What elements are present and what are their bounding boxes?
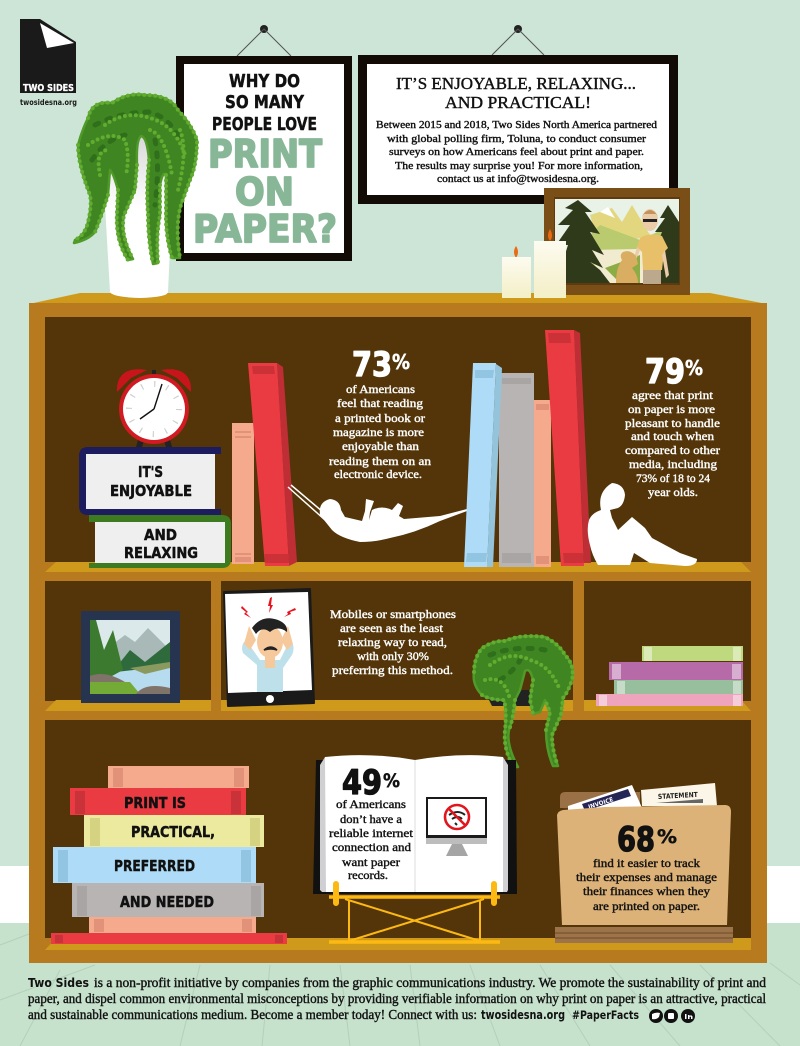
- stat: 73%: magazine is more: [333, 425, 424, 439]
- logo: Two Sides: twosidesna.org: [20, 98, 77, 107]
- icon: girl reading silhouette: [588, 483, 697, 566]
- stat: 68%: are printed on paper.: [593, 899, 700, 913]
- stat: 49%: connection and: [332, 840, 411, 854]
- footer text: #PaperFacts: [572, 1008, 639, 1022]
- title: WHY DO: [229, 71, 300, 92]
- icon: monitor with no wifi: [426, 797, 487, 856]
- footer text: [28, 975, 766, 1022]
- statement: [641, 783, 717, 806]
- plant on top of shelf: [74, 94, 197, 298]
- clock: [117, 369, 191, 447]
- stat: 68%: their finances when they: [583, 884, 710, 898]
- book stand: [329, 884, 500, 942]
- book: it's enjoyable: ENJOYABLE: [110, 482, 192, 500]
- stat: 79%: 79: [645, 352, 685, 391]
- stat: 79%: year olds.: [648, 485, 698, 499]
- stat: 79%: on paper is more: [628, 402, 715, 416]
- intro heading: AND PRACTICAL!: [445, 93, 591, 112]
- panel: intro frame: [358, 25, 678, 204]
- open book on stand: [313, 755, 517, 942]
- book stack: print is practical, preferred and needed: PREFERRED: [114, 857, 195, 875]
- stat: 73%: reading them on an: [329, 454, 431, 468]
- dog: [616, 251, 638, 283]
- text: mobiles: preferring this method.: [332, 663, 453, 677]
- title: PRINT: [208, 132, 323, 177]
- invoice: [568, 785, 643, 815]
- book stack: print is practical, preferred and needed: PRINT IS: [124, 794, 186, 812]
- title: [193, 71, 337, 252]
- framed landscape: [81, 611, 180, 703]
- stat: 49%: records.: [348, 868, 388, 882]
- stat: 73%: enjoyable than: [342, 439, 419, 453]
- stat: 68%: find it easier to track: [593, 856, 700, 870]
- folder with documents: [555, 783, 733, 943]
- stat: 73%: feel that reading: [337, 396, 423, 410]
- icon: person reading in hammock: [288, 485, 467, 542]
- stat: 79%: media, including: [629, 457, 717, 471]
- text: mobiles: are seen as the least: [340, 621, 444, 635]
- books on top shelf, left: [232, 363, 297, 566]
- stat: 49%: don’t have a: [340, 812, 403, 826]
- stat: 49%: of Americans: [336, 797, 406, 811]
- icons: social: [649, 1009, 695, 1023]
- books on top shelf, right: [464, 330, 591, 567]
- intro text: The results may surprise you! For more information,: [395, 160, 643, 172]
- book stack: print is practical, preferred and needed: [51, 766, 287, 944]
- icon: lightning bolts: [241, 597, 296, 618]
- tablet with stressed man: [224, 589, 314, 706]
- stat: 68%: their expenses and manage: [576, 870, 717, 884]
- stat: 79%: %: [685, 356, 703, 380]
- text: mobiles: [330, 607, 456, 677]
- logo: Two Sides: [20, 19, 77, 107]
- stat: 79%: and touch when: [631, 429, 714, 443]
- stat: 49%: 49: [342, 763, 382, 802]
- text: mobiles: relaxing way to read,: [338, 635, 447, 649]
- stat: 68%: 68: [617, 820, 655, 859]
- stat: 79%: compared to other: [625, 443, 720, 457]
- plant pot: [105, 135, 172, 298]
- intro text: with global polling firm, Toluna, to conduct consumer: [387, 133, 646, 145]
- stat: 68%: [576, 820, 717, 913]
- logo: Two Sides: TWO SIDES: [23, 83, 74, 94]
- footer text: Two Sides: [28, 975, 89, 990]
- framed photo: man and dog: [544, 188, 690, 295]
- panel: title frame: [176, 25, 352, 261]
- statement: STATEMENT: [658, 791, 698, 801]
- stat: 68%: %: [657, 826, 677, 848]
- intro heading: IT’S ENJOYABLE, RELAXING...: [396, 74, 636, 93]
- intro text: surveys on how Americans feel about print and paper.: [389, 146, 644, 158]
- footer text: paper, and dispel common environmental misconceptions by providing verifiable information on why print on paper is an attractive, practical: [28, 991, 766, 1006]
- man: [242, 618, 294, 692]
- stat: 49%: reliable internet: [329, 826, 414, 840]
- book: it's enjoyable: [79, 447, 221, 515]
- invoice: INVOICE: [587, 796, 614, 811]
- stat: 79%: pleasant to handle: [625, 416, 720, 430]
- plant on middle shelf: [474, 636, 573, 767]
- intro text: [376, 119, 658, 185]
- candles: [502, 229, 566, 298]
- footer text: and sustainable communications medium. Become a member today! Connect with us:: [28, 1007, 477, 1022]
- stat: 73%: of Americans: [346, 382, 415, 396]
- stat: 79%: agree that print: [632, 388, 714, 402]
- book: it's enjoyable: IT'S: [138, 463, 163, 481]
- title: PEOPLE LOVE: [212, 114, 317, 135]
- text: mobiles: Mobiles or smartphones: [330, 607, 456, 621]
- stat: 49%: %: [383, 770, 400, 792]
- stat: 79%: 73% of 18 to 24: [636, 471, 710, 485]
- stat: 73%: a printed book or: [335, 411, 425, 425]
- stat: 73%: 73: [352, 345, 392, 384]
- title: SO MANY: [225, 92, 305, 113]
- stat: 73%: electronic device.: [334, 467, 422, 481]
- footer text: twosidesna.org: [481, 1008, 565, 1022]
- intro heading: [396, 74, 636, 112]
- book stack: print is practical, preferred and needed: PRACTICAL,: [131, 823, 215, 841]
- text: mobiles: with only 30%: [357, 649, 429, 663]
- stat: 49%: want paper: [342, 855, 400, 869]
- stat: 73%: %: [392, 350, 410, 374]
- title: PAPER?: [193, 207, 337, 252]
- book stack, middle right: [596, 646, 743, 706]
- book: and relaxing: AND: [144, 526, 177, 544]
- shelf unit: [29, 293, 767, 963]
- book: and relaxing: RELAXING: [124, 544, 198, 562]
- stat: 79%: [625, 352, 720, 499]
- stat: 73%: [329, 345, 431, 481]
- man: [634, 209, 669, 284]
- stat: 49%: [329, 763, 414, 882]
- book: and relaxing: [89, 515, 231, 568]
- intro text: contact us at info@twosidesna.org.: [437, 173, 599, 185]
- footer text: is a non-profit initiative by companies from the graphic communications industry. We promote the sustainability of print and: [94, 975, 766, 990]
- intro text: Between 2015 and 2018, Two Sides North America partnered: [376, 119, 658, 131]
- title: ON: [235, 170, 294, 215]
- book stack: print is practical, preferred and needed: AND NEEDED: [120, 893, 214, 911]
